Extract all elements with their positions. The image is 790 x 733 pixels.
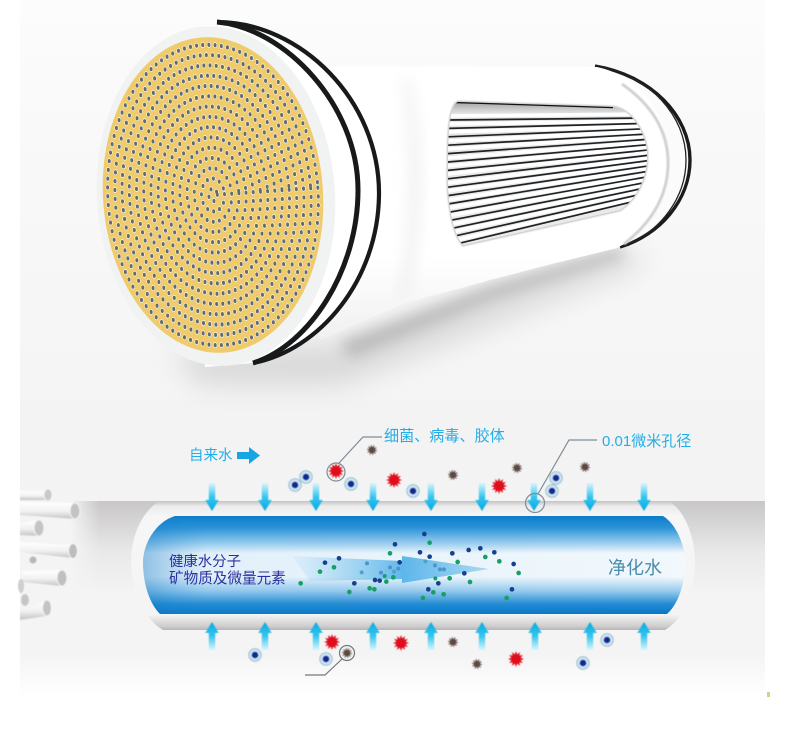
water gradient — [140, 516, 690, 614]
tube shoulder shading — [398, 78, 421, 300]
right end outer seal — [595, 66, 690, 247]
right end ring body — [592, 67, 687, 247]
pleat dark lines — [448, 118, 650, 246]
right end cap shading — [622, 84, 668, 244]
background panel: diagram area — [20, 400, 765, 698]
side window soft edge — [448, 102, 647, 245]
side window with pleated membrane — [448, 102, 648, 245]
water molecules and minerals — [298, 532, 521, 600]
background panel: product photo area — [20, 0, 765, 500]
right end cap — [560, 67, 668, 262]
left backdrop fade — [70, 501, 100, 591]
fibre 1 — [20, 489, 52, 501]
tube edge contact shadow — [340, 247, 625, 358]
label: healthy water molecules: 健康水分子 — [169, 553, 241, 570]
cartridge tube body — [320, 66, 617, 340]
left gray backdrop — [70, 501, 170, 591]
hollow fibre bundle on left — [18, 489, 80, 620]
water molecules — [323, 532, 516, 592]
pleat highlights — [448, 114, 650, 242]
membrane tube outer wall — [131, 501, 695, 630]
diagram: hollow-fibre filtration — [18, 428, 765, 675]
fibre 9 — [20, 600, 52, 620]
water left tint — [143, 516, 446, 614]
bottom inflow arrows — [205, 622, 651, 650]
fibre 5 — [30, 556, 36, 564]
front O-ring — [217, 22, 358, 363]
label: purified water: 净化水 — [608, 558, 662, 578]
yellow perforated plate — [92, 30, 334, 360]
front cap body — [205, 25, 378, 367]
right end inner seal — [600, 67, 686, 245]
product wide shadow — [170, 250, 650, 385]
callout: lower particle ring and leader — [305, 646, 354, 675]
impurities above membrane — [289, 446, 589, 497]
yellow plate — [92, 30, 334, 360]
impurities below membrane — [249, 634, 613, 669]
label: bacteria, viruses, colloids: 细菌、病毒、胶体 — [384, 428, 505, 445]
hole centers — [98, 38, 328, 352]
rear O-ring — [217, 22, 379, 363]
label: 0.01 micron pore: 0.01微米孔径 — [602, 433, 691, 450]
mineral elements — [298, 540, 521, 600]
hole rims — [98, 38, 328, 352]
label: tap water: 自来水 — [189, 447, 233, 464]
fibre 4 — [20, 542, 78, 558]
right gray backdrop — [660, 501, 765, 591]
callout: pore ring and leader — [526, 440, 597, 512]
plate holes — [98, 38, 328, 352]
water chamber — [140, 516, 690, 614]
arrow: tap water direction — [237, 447, 260, 464]
window top edge — [456, 102, 613, 107]
callout: bacteria ring and leader — [327, 437, 382, 481]
product: filter cartridge — [85, 18, 690, 385]
fibre 8 — [20, 594, 30, 606]
label: minerals and trace elements: 矿物质及微量元素 — [169, 570, 286, 587]
top inflow arrows — [205, 483, 651, 511]
fibre 7 — [18, 579, 24, 593]
fibre 2 — [20, 502, 80, 519]
white flange disk — [85, 18, 347, 374]
fibre 6 — [22, 570, 67, 586]
corner artifact mark — [767, 692, 770, 697]
flow arrow: front segment — [402, 556, 489, 583]
fibre 3 — [20, 520, 44, 536]
flow arrow: rear segment — [292, 556, 402, 581]
